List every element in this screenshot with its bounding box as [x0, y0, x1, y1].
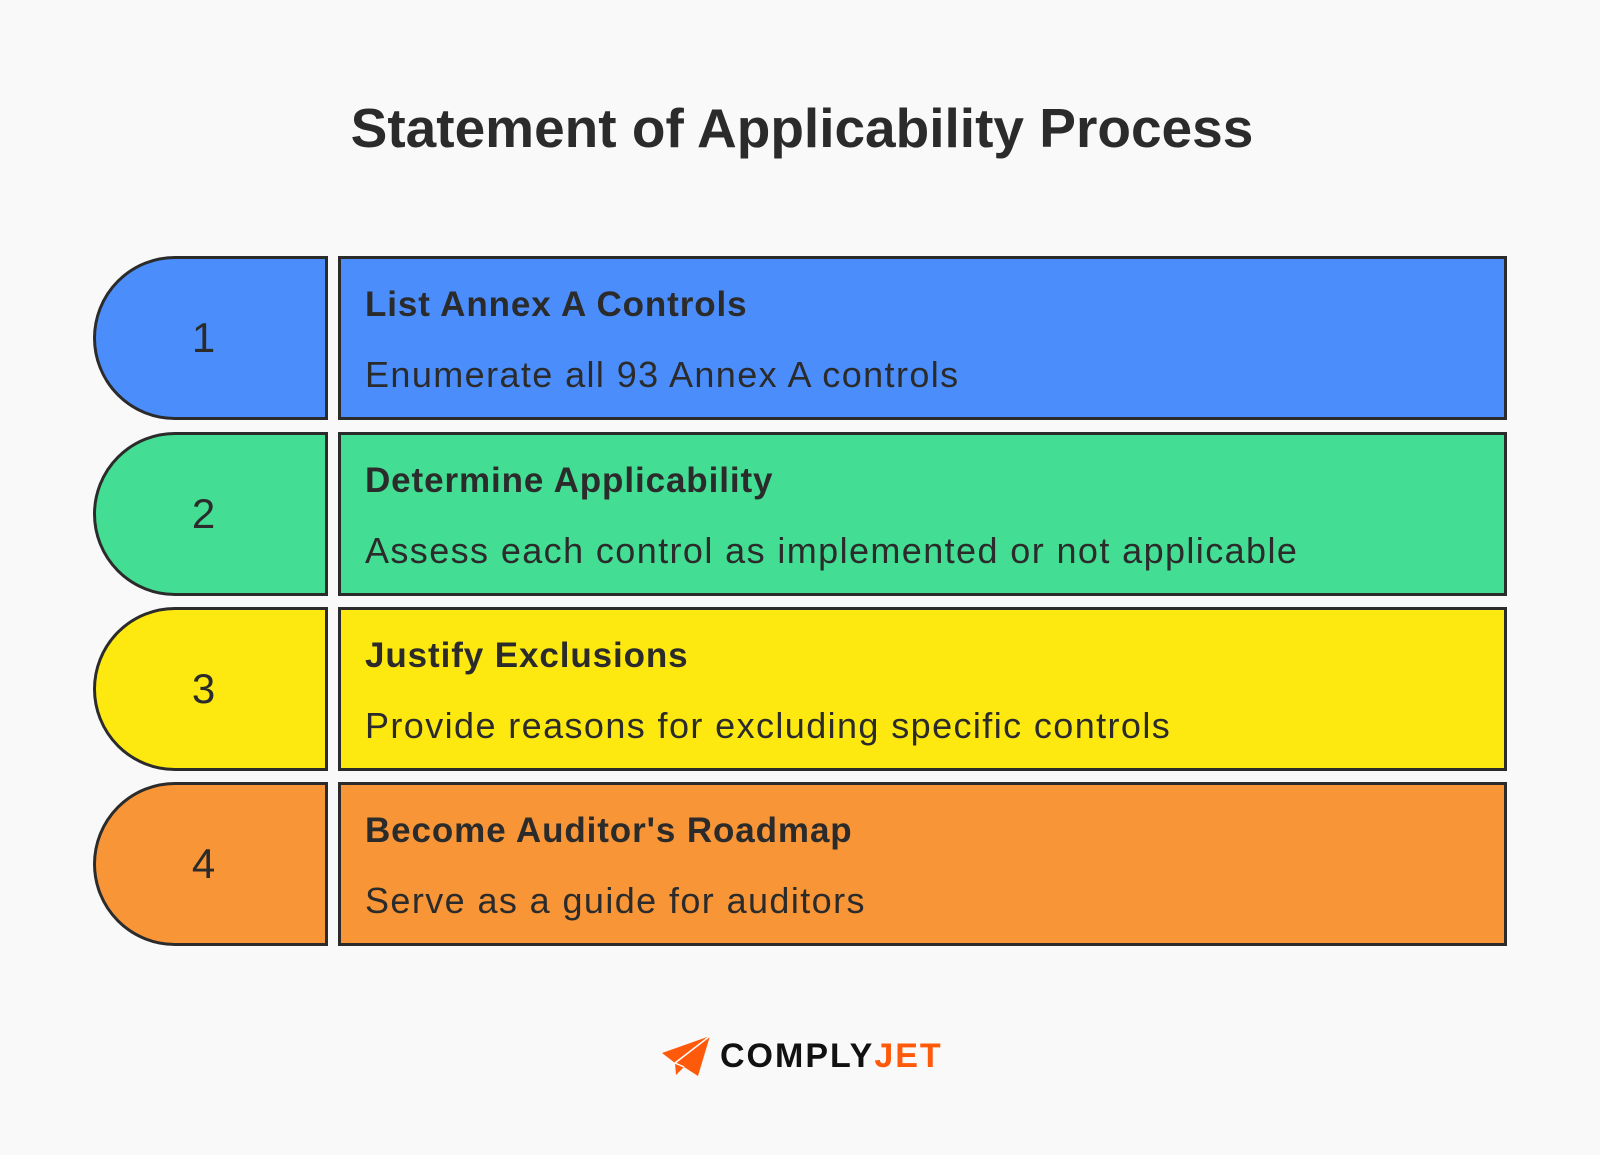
step 4 text box: Serve as a guide for auditors: [365, 880, 866, 921]
step 4 text box: Become Auditor's Roadmap: [365, 811, 853, 850]
logo: [662, 1036, 943, 1076]
step 3 text box: Justify Exclusions: [365, 636, 689, 675]
number badge 3: 3: [192, 665, 215, 712]
number badge 4: 4: [192, 840, 215, 887]
step 4 text box: [338, 782, 1507, 946]
step 1: [93, 256, 1507, 420]
step 2 text box: [338, 432, 1507, 596]
step 2: [93, 432, 1507, 596]
number badge 1: 1: [192, 314, 215, 361]
step 2 text box: Determine Applicability: [365, 461, 773, 500]
step 1 text box: [338, 256, 1507, 420]
number badge 1: [93, 256, 328, 420]
icon: paper plane: [662, 1036, 710, 1076]
step 3 text box: [338, 607, 1507, 771]
brand name: COMPLYJET: [720, 1037, 943, 1075]
step 1 text box: Enumerate all 93 Annex A controls: [365, 354, 960, 395]
number badge 3: [93, 607, 328, 771]
step 3: [93, 607, 1507, 771]
step 2 text box: Assess each control as implemented or not applicable: [365, 530, 1298, 571]
title: Statement of Applicability Process: [351, 97, 1253, 159]
step 1 text box: List Annex A Controls: [365, 285, 748, 324]
step 3 text box: Provide reasons for excluding specific controls: [365, 705, 1171, 746]
number badge 2: [93, 432, 328, 596]
number badge 2: 2: [192, 490, 215, 537]
step 4: [93, 782, 1507, 946]
number badge 4: [93, 782, 328, 946]
